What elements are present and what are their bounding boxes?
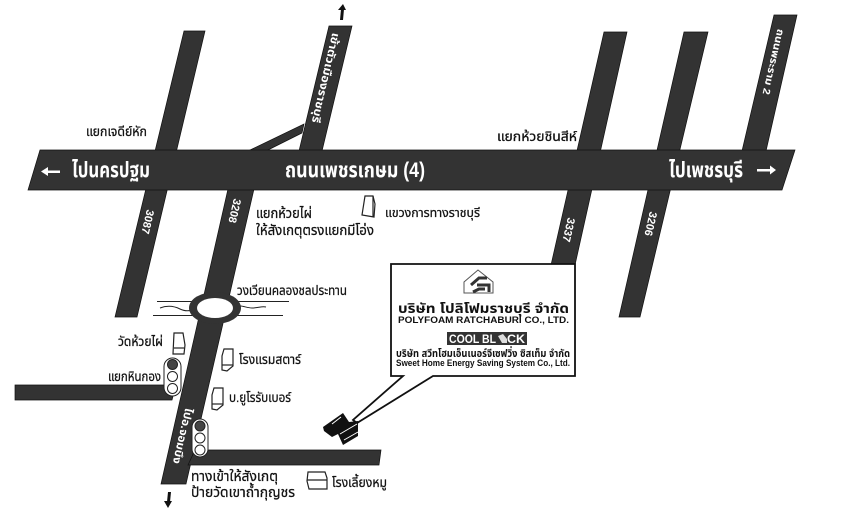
icon: building highway office (362, 196, 375, 217)
label: to Phetchaburi: ไปเพชรบุรี (669, 159, 743, 183)
label: Euro Rubber: บ.ยูโรรับเบอร์ (229, 390, 292, 405)
icon: building rubber (212, 388, 223, 410)
road 3337: 3337 (559, 216, 577, 243)
road 3208: 3208 (225, 197, 243, 224)
Cool Block badge: COOL BL (449, 332, 496, 346)
road 3208 (161, 189, 254, 484)
main road: Phetkasem (28, 150, 795, 190)
canal (153, 302, 289, 316)
icon: building pig farm (307, 472, 327, 489)
label: Hin Kong junction: แยกหินกอง (108, 369, 161, 384)
traffic light: Hin Kong (164, 358, 181, 396)
traffic light: entrance (192, 419, 208, 457)
labels (86, 124, 577, 501)
label: Chedi Hak junction: แยกเจดีย์หัก (86, 124, 147, 139)
road rama 2: ถนนพระราม 2 (760, 28, 785, 96)
label: Huai Chin Si junction: แยกห้วยชินสีห์ (497, 129, 577, 144)
left side road (15, 385, 176, 400)
subsidiary name Thai: บริษัท สวีทโฮมเอ็นเนอร์จีเซฟวิ่ง ซิสเท็ม จำกัด (396, 346, 570, 360)
label: highway district: แขวงการทางราชบุรี (385, 206, 480, 220)
bottom access road (188, 450, 381, 465)
Cool Block badge (447, 332, 527, 346)
road to city (248, 26, 352, 151)
company name English: POLYFOAM RATCHABURI CO., LTD. (398, 315, 569, 326)
road 3208: ไปอ.จอมบึง (170, 407, 194, 465)
arrow: south (164, 492, 172, 508)
company name Thai: บริษัท โปลิโฟมราชบุรี จำกัด (398, 301, 569, 316)
subsidiary name English: Sweet Home Energy Saving System Co., Ltd. (396, 358, 570, 368)
Cool Block badge: CK (507, 332, 525, 346)
label: to Nakhon Pathom: ไปนครปฐม (72, 159, 150, 182)
arrow: north (338, 4, 346, 20)
label: entrance note: ทางเข้าให้สังเกตุ (191, 468, 278, 485)
label: Huai Phai junction: แยกห้วยไผ่ (256, 205, 312, 221)
roundabout (189, 292, 241, 324)
label: Star hotel: โรงแรมสตาร์ (239, 352, 302, 367)
callout panel (353, 264, 575, 423)
label: Wat Khao Tham Kunchon sign: ป้ายวัดเขาถ้ำกุญชร (191, 482, 295, 501)
arrow: right (757, 166, 776, 174)
road 3206: 3206 (641, 210, 659, 237)
road 3206 (619, 32, 708, 317)
label: Phetkasem road: ถนนเพชรเกษม (4) (285, 159, 425, 182)
label: Wat Huai Phai: วัดห้วยไผ่ (118, 334, 163, 349)
label: jar at junction: ให้สังเกตุตรงแยกมีโอ่ง (256, 222, 374, 239)
label: irrigation canal roundabout: วงเวียนคลองชลประทาน (237, 283, 347, 298)
road 3087 (115, 31, 205, 317)
label: pig farm: โรงเลี้ยงหมู (332, 473, 387, 490)
road 3337 (551, 32, 627, 265)
road 3087: 3087 (138, 208, 156, 235)
icon: company logo (464, 270, 493, 293)
icon: building hotel (222, 349, 233, 371)
icon: building temple (173, 333, 185, 354)
arrow: left (41, 167, 60, 176)
icon: factory (323, 413, 358, 445)
road to city: เข้าตัวเมืองราชบุรี (309, 32, 342, 124)
road rama 2 (742, 15, 797, 151)
